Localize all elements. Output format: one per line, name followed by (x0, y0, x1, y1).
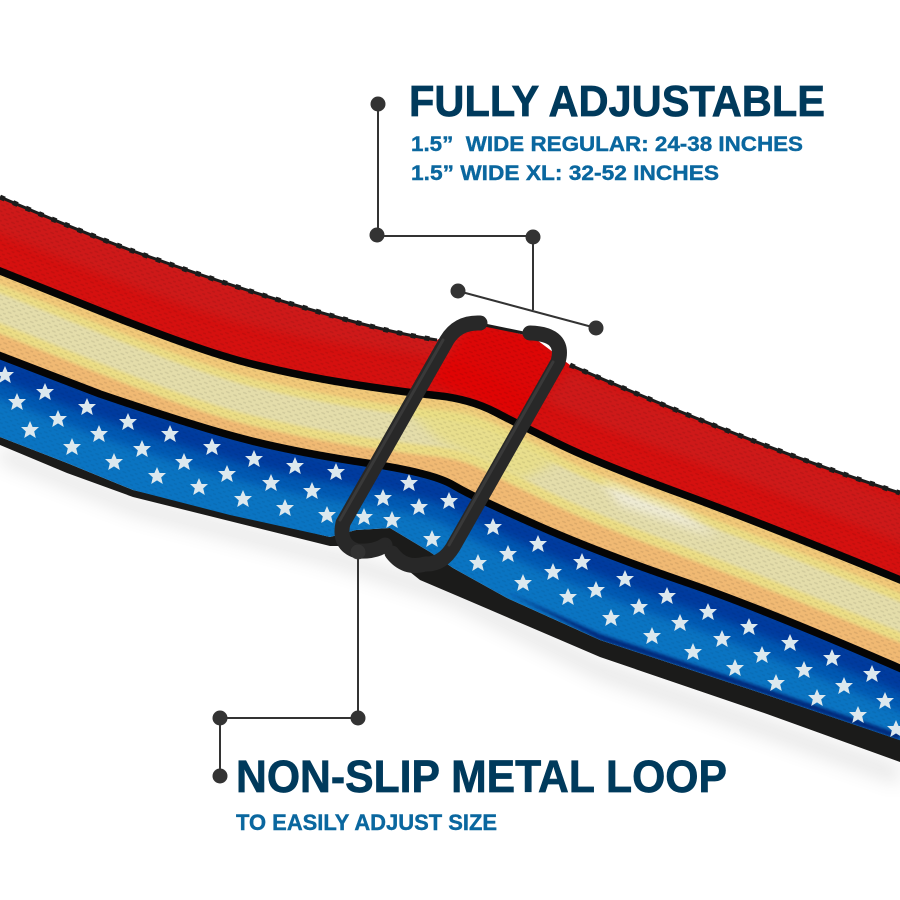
black webbing backing (0, 437, 900, 762)
connector: non-slip loop callout (212, 544, 366, 784)
white stars (0, 366, 900, 737)
red band (0, 190, 900, 590)
heading: non-slip metal loop: NON-SLIP METAL LOOP (236, 751, 727, 802)
sub text: easily adjust size: TO EASILY ADJUST SIZE (236, 810, 497, 835)
strap drop shadow (0, 445, 900, 785)
connector: fully adjustable callout (370, 96, 540, 310)
yellow and orange band (0, 260, 900, 680)
size text block: 1.5” WIDE REGULAR: 24-38 INCHES (411, 132, 803, 156)
strap: patterned webbing (0, 190, 900, 762)
blue band (0, 340, 900, 760)
heading: fully adjustable: FULLY ADJUSTABLE (409, 77, 825, 126)
size text block: 1.5” WIDE XL: 32-52 INCHES (411, 161, 719, 185)
black stripes and woven top edge (0, 197, 900, 677)
metal loop (340, 323, 559, 566)
connector: loop width bracket (450, 284, 604, 336)
size text block (411, 132, 803, 185)
